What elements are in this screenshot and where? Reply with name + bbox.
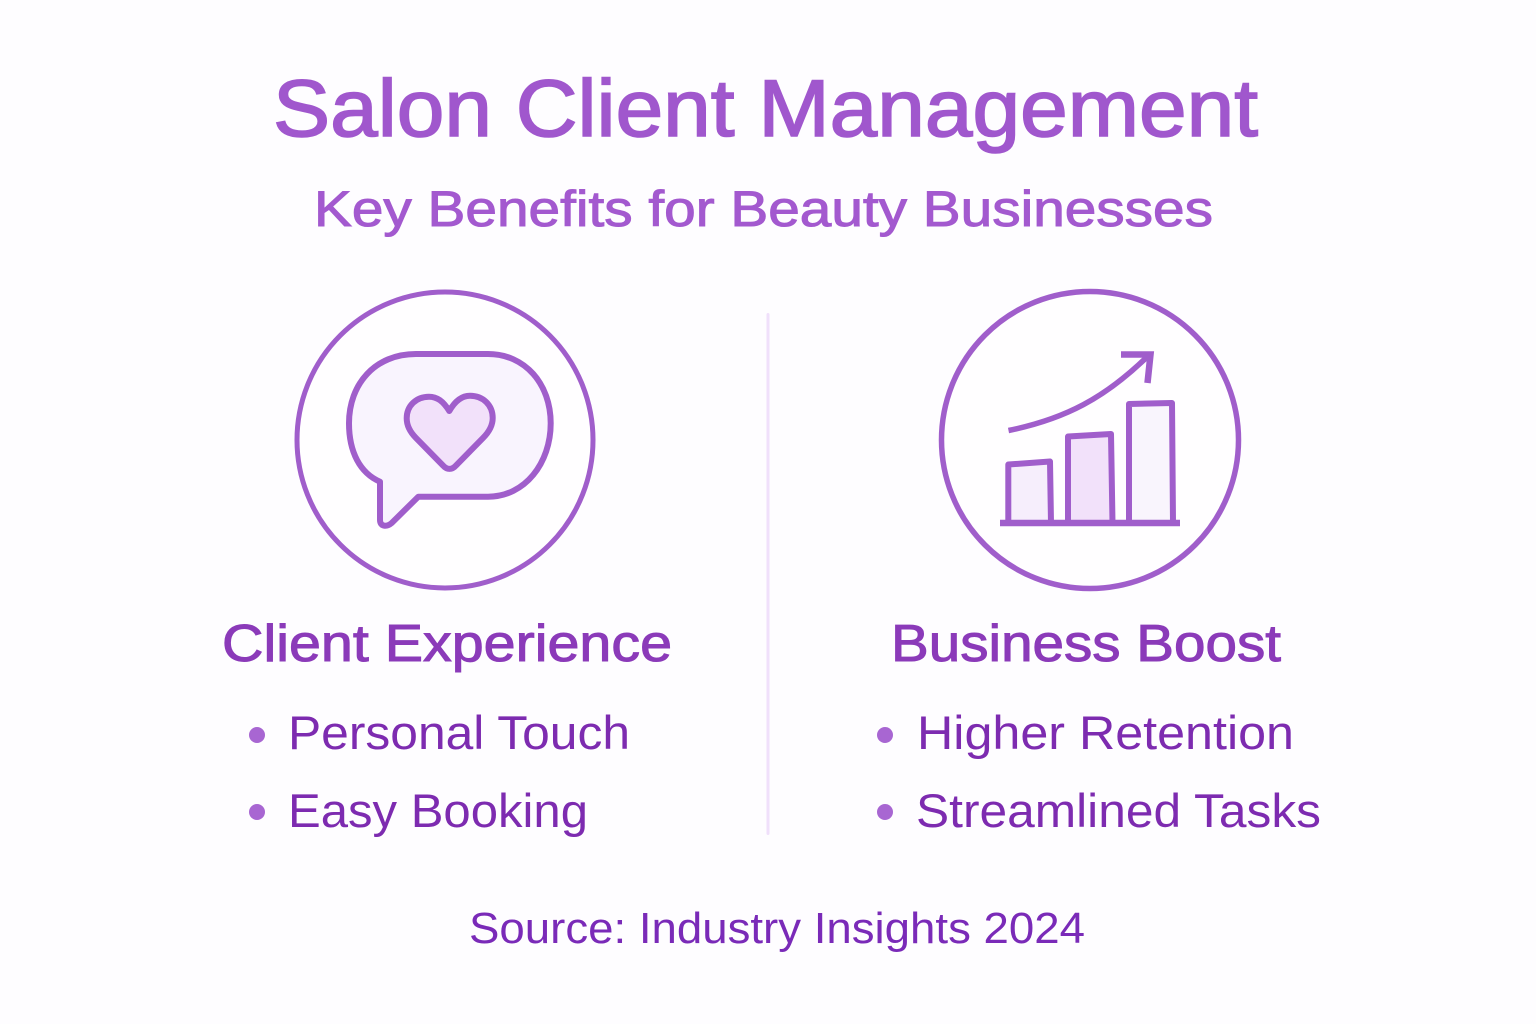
panel: business boost (877, 292, 1321, 837)
panel: client experience (222, 292, 672, 837)
bullet: easy booking: Easy Booking (288, 784, 588, 837)
heading: client experience: Client Experience (222, 615, 672, 673)
title: Salon Client Management (273, 64, 1258, 154)
bullet: streamlined tasks: Streamlined Tasks (916, 784, 1321, 837)
icon: growth bar chart (942, 292, 1238, 588)
subtitle: Key Benefits for Beauty Businesses (314, 181, 1213, 237)
icon: chat bubble with heart (297, 292, 593, 588)
heading: business boost: Business Boost (891, 615, 1282, 673)
source note: Source: Industry Insights 2024 (469, 904, 1085, 953)
bullet: higher retention: Higher Retention (917, 706, 1294, 759)
divider (766, 313, 770, 835)
bullet: personal touch: Personal Touch (288, 706, 630, 759)
